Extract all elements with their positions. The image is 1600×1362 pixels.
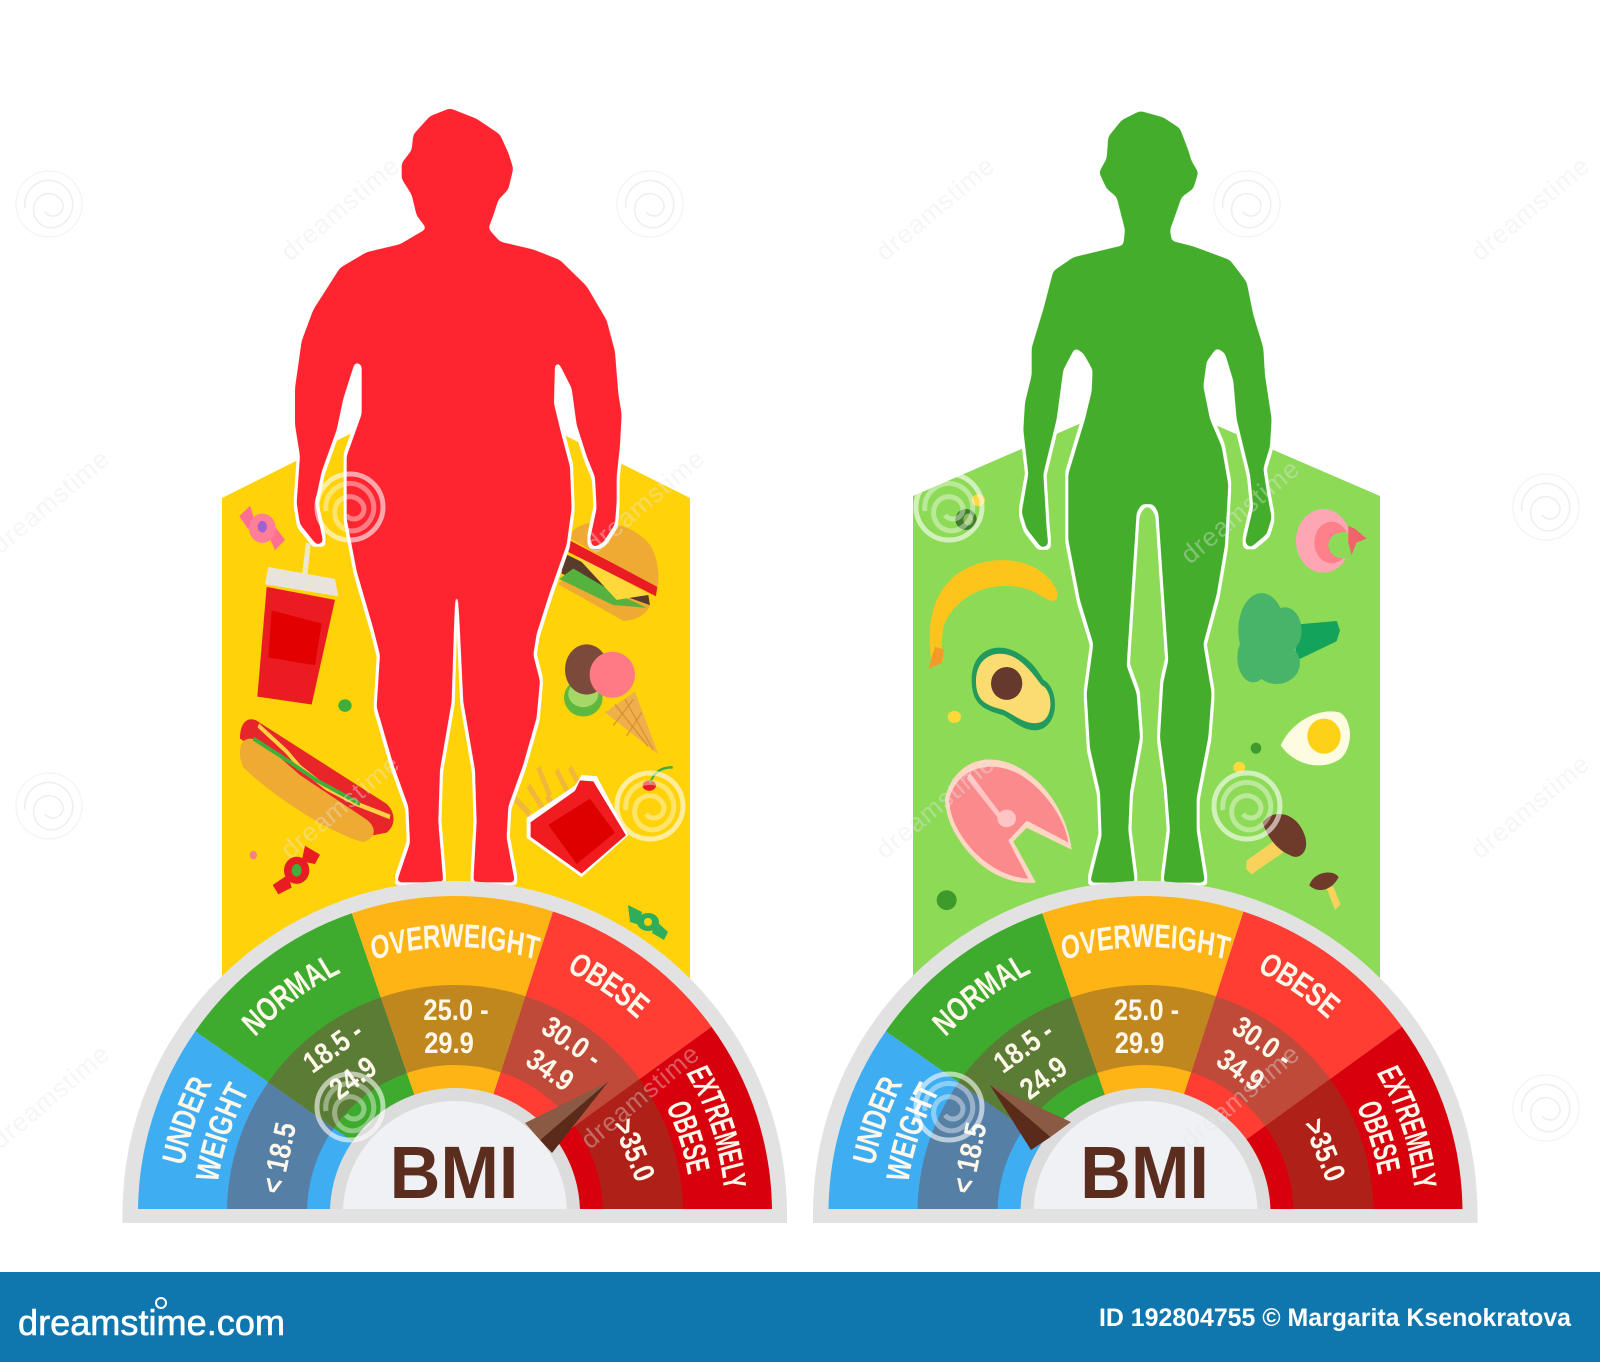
value: 25.0 - 29.9: 29.9 — [424, 1026, 474, 1059]
BMI gauge: left (obese) — [122, 880, 787, 1223]
BMI gauge: right (normal) — [813, 880, 1478, 1223]
watermark text: dreamstime — [575, 1038, 706, 1155]
icon: egg — [1281, 711, 1350, 765]
watermark text: dreamstime — [275, 150, 406, 267]
value: above 35.0: >35.0 — [607, 1114, 662, 1186]
watermark text: dreamstime — [1465, 748, 1596, 865]
BMI heading: BMI — [390, 1132, 518, 1214]
value: 30.0 - 34.9 — [520, 1009, 608, 1098]
label: OBESE: OBESE — [1260, 954, 1341, 1019]
yellow dot — [972, 494, 985, 506]
watermark text: dreamstime — [275, 748, 406, 865]
gauge inner colour ring — [307, 1065, 603, 1213]
gauge centre hub — [330, 1088, 580, 1213]
watermark text: dreamstime — [1175, 1038, 1306, 1155]
needle pointing to extremely obese — [525, 1082, 608, 1153]
value: 25.0 - 29.9: 25.0 - — [423, 993, 489, 1026]
watermark text: dreamstime — [1465, 150, 1596, 267]
gauge bottom strip — [122, 1209, 787, 1223]
junk food icons — [239, 506, 673, 894]
gauge dark value bands — [918, 985, 1374, 1213]
value: 30.0 - 34.9: 30.0 - — [536, 1009, 608, 1074]
icon: shrimp — [1296, 509, 1367, 573]
icon: cherry — [643, 767, 673, 791]
watermark text: dreamstime — [1175, 453, 1306, 570]
icon: small mushroom — [1309, 872, 1341, 910]
gauge dark value bands — [227, 985, 683, 1213]
value: 25.0 - 29.9: 29.9 — [1115, 1026, 1164, 1059]
watermark text: dreamstime — [870, 150, 1001, 267]
green dot — [338, 699, 352, 712]
value: below 18.5: < 18.5 — [945, 1119, 993, 1196]
label: OVERWEIGHT: OVERWEIGHT — [1062, 924, 1232, 959]
footer bar — [0, 1272, 1600, 1362]
green healthy body silhouette — [1022, 111, 1272, 883]
watermark spirals on colour — [317, 474, 1280, 1140]
value: 25.0 - 29.9: 25.0 - — [1114, 993, 1179, 1026]
label: OBESE (extremely): OBESE — [1358, 1102, 1400, 1175]
label: OBESE: OBESE — [570, 954, 650, 1019]
value: 18.5 - 24.9: 24.9 — [323, 1050, 383, 1106]
icon: burger — [558, 522, 658, 621]
value: 25.0 - 29.9 — [1114, 993, 1179, 1059]
value: 18.5 - 24.9: 24.9 — [1013, 1050, 1073, 1106]
watermark text: dreamstime — [580, 443, 711, 560]
gauge centre hub — [1020, 1088, 1270, 1213]
icon: broccoli — [1237, 593, 1340, 684]
label: OBESE (extremely): OBESE — [668, 1102, 710, 1175]
gauge outer colour bands — [828, 896, 1462, 1213]
gauge grey frame — [122, 881, 787, 1223]
gauge grey frame — [813, 881, 1478, 1223]
footer image credit: ID 192804755 © Margarita Ksenokratova — [1099, 1304, 1572, 1332]
icon: large mushroom — [1246, 814, 1306, 874]
icon: salmon steak — [945, 760, 1072, 883]
label: UNDER: UNDER — [162, 1077, 212, 1163]
BMI heading: BMI — [1080, 1132, 1209, 1214]
value: 25.0 - 29.9 — [423, 993, 489, 1059]
icon: olive — [955, 509, 977, 530]
label: UNDER: UNDER — [852, 1077, 903, 1163]
label: WEIGHT: WEIGHT — [196, 1081, 247, 1179]
value: 30.0 - 34.9: 34.9 — [520, 1042, 580, 1098]
icon: soda cup — [257, 542, 338, 705]
icon: pink candy — [239, 506, 285, 550]
value: 18.5 - 24.9 — [297, 1014, 383, 1106]
icon: hot dog — [240, 719, 394, 842]
dark green dot — [937, 890, 957, 910]
label: EXTREMELY: EXTREMELY — [1376, 1065, 1437, 1186]
value: 30.0 - 34.9 — [1211, 1009, 1299, 1098]
healthy food icons — [928, 494, 1367, 910]
red obese body silhouette — [295, 108, 622, 882]
gauge outer colour bands — [138, 896, 772, 1213]
label: NORMAL: NORMAL — [931, 958, 1032, 1036]
icon: green candy — [628, 905, 668, 940]
icon: banana — [928, 560, 1057, 669]
value: 18.5 - 24.9: 18.5 - — [987, 1014, 1060, 1079]
pink dot — [250, 851, 257, 859]
value: below 18.5: < 18.5 — [255, 1119, 303, 1196]
watermark spirals on white — [16, 171, 1579, 1141]
gauge bottom strip — [813, 1209, 1478, 1223]
label: EXTREMELY: EXTREMELY — [686, 1065, 746, 1186]
icon: avocado — [972, 648, 1055, 730]
label: OVERWEIGHT: OVERWEIGHT — [371, 924, 541, 959]
label: NORMAL: NORMAL — [240, 958, 341, 1036]
value: 18.5 - 24.9: 18.5 - — [297, 1014, 369, 1079]
icon: ice cream cone — [564, 644, 658, 754]
needle pointing to normal — [990, 1085, 1071, 1150]
watermark text: dreamstime — [870, 748, 1001, 865]
panel: yellow junk food background — [222, 381, 690, 985]
value: above 35.0: >35.0 — [1297, 1114, 1352, 1186]
gauge inner colour ring — [998, 1065, 1294, 1213]
panel: green healthy food background — [913, 395, 1380, 985]
icon: fries box — [527, 775, 628, 877]
value: 18.5 - 24.9 — [987, 1014, 1073, 1106]
yellow dot — [948, 711, 961, 723]
label: WEIGHT: WEIGHT — [886, 1081, 938, 1179]
footer logo: dreamstime.com: dreamstime.com — [18, 1302, 285, 1343]
value: 30.0 - 34.9: 34.9 — [1211, 1042, 1271, 1098]
value: 30.0 - 34.9: 30.0 - — [1226, 1009, 1299, 1074]
watermark text — [0, 150, 1596, 1155]
small dots — [1233, 743, 1261, 773]
icon: french fries — [515, 767, 578, 814]
icon: red candy — [273, 846, 320, 894]
